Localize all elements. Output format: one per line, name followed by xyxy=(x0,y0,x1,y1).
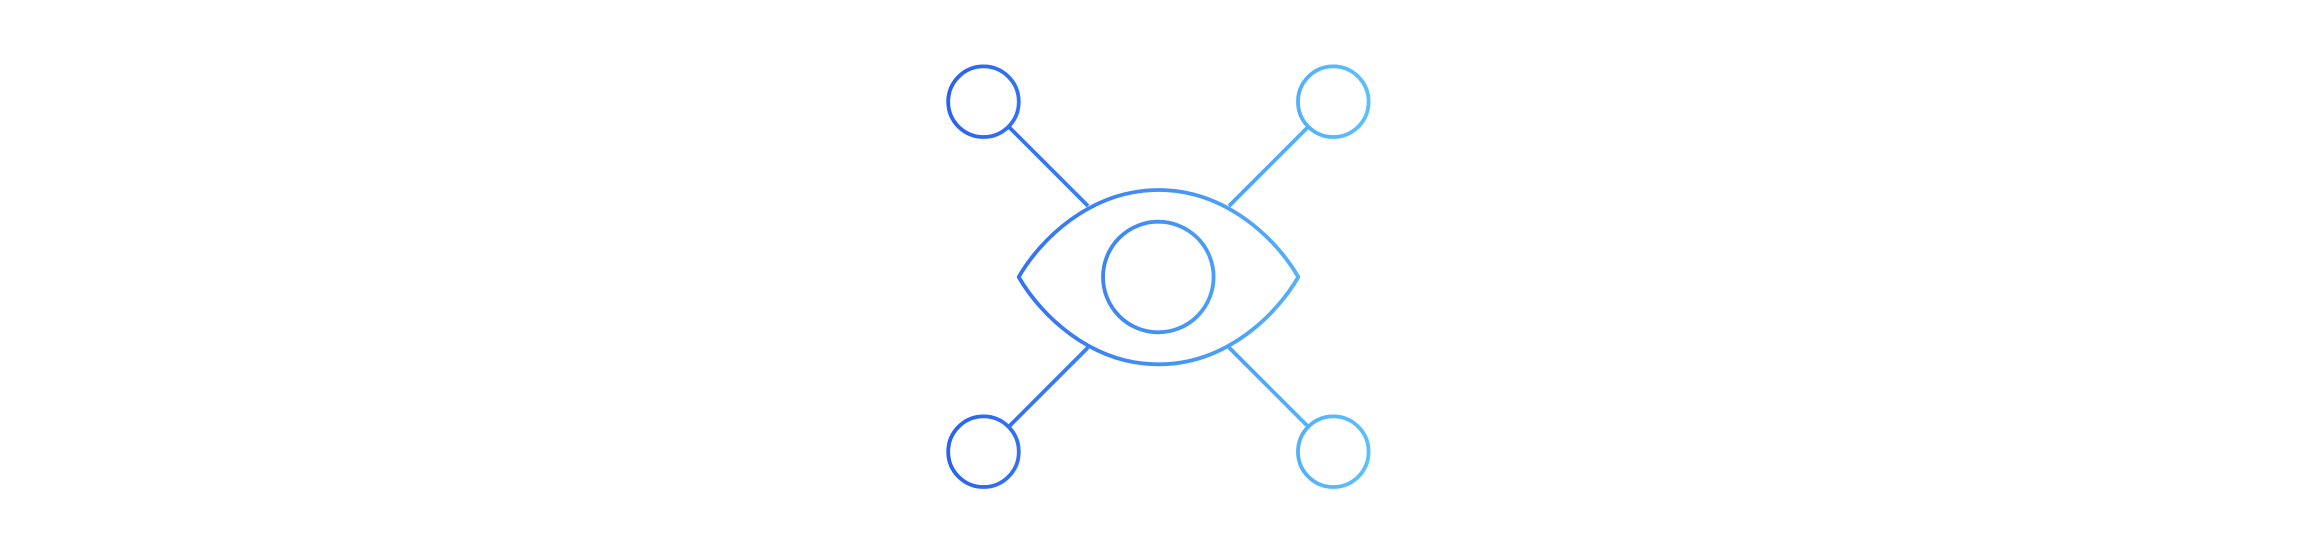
eye outline xyxy=(1019,190,1298,364)
connector: bottom right xyxy=(1229,348,1308,426)
eye pupil xyxy=(1103,222,1214,332)
node: top left xyxy=(948,66,1019,137)
connector: top left xyxy=(1010,128,1088,206)
connector: top right xyxy=(1229,128,1308,206)
node: bottom right xyxy=(1298,416,1369,487)
connector: bottom left xyxy=(1010,348,1088,426)
node: bottom left xyxy=(948,416,1019,487)
node: top right xyxy=(1298,66,1369,137)
